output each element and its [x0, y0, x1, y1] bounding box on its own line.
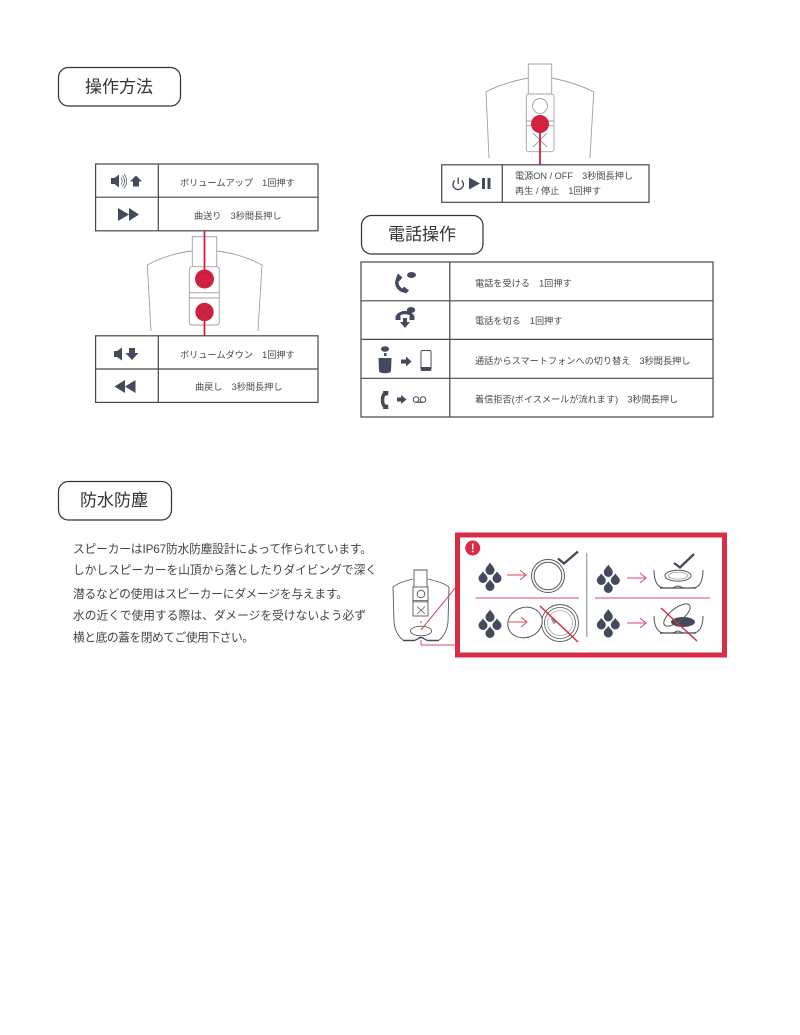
icon: power, play, pause: [453, 178, 490, 190]
illustration: speaker front with power button: [486, 64, 594, 165]
heading: 防水防塵: 防水防塵: [80, 491, 148, 510]
illustration: speaker with cap callout: [393, 570, 456, 645]
panel: waterproof warning box: [458, 535, 724, 655]
illustration: speaker front with volume buttons: [147, 231, 262, 336]
text: power and playback: [515, 170, 633, 196]
text block: waterproof description: 横と底の蓋を閉めてご使用下さい。: [73, 630, 254, 644]
heading: 電話操作: [362, 216, 483, 254]
icon: volume down: [114, 348, 138, 360]
text block: waterproof description: スピーカーはIP67防水防塵設計によって作られています。: [73, 542, 372, 556]
text: volume up: ボリュームアップ 1回押す: [180, 177, 295, 188]
panel: phone operation table: [361, 262, 713, 417]
text block: waterproof description: 水の近くで使用する際は、ダメージを受けないよう必ず: [73, 608, 366, 622]
text block: waterproof description: [73, 542, 377, 644]
panel: power and playback table: [442, 165, 649, 202]
text: answer call: 電話を受ける 1回押す: [475, 278, 572, 288]
heading: 操作方法: 操作方法: [85, 78, 153, 96]
icon: fast forward: [118, 208, 139, 221]
text: power and playback: 再生 / 停止 1回押す: [515, 185, 601, 196]
icon: rewind: [114, 380, 136, 393]
panel: volume down and previous track table: [96, 336, 318, 402]
icon: switch to smartphone: [378, 346, 431, 373]
text: power and playback: 電源ON / OFF 3秒間長押し: [515, 170, 633, 181]
example: side cap open: [597, 600, 703, 641]
panel: volume up and next track table: [96, 164, 318, 231]
example: bottom cap open: [478, 602, 578, 643]
text: end call: 電話を切る 1回押す: [475, 315, 562, 326]
icon: answer call: [396, 272, 416, 294]
text: next track: 曲送り 3秒間長押し: [194, 210, 282, 221]
example: side cap closed correctly: [597, 554, 703, 593]
icon: reject to voicemail: [382, 391, 426, 409]
heading: 電話操作: 電話操作: [388, 225, 456, 244]
icon: volume up: [111, 174, 142, 188]
heading: 操作方法: [58, 68, 180, 106]
text: switch to smartphone: 通話からスマートフォンへの切り替え 3秒間長押し: [475, 355, 690, 366]
text: reject to voicemail: 着信拒否(ボイスメールが流れます) 3秒間長押し: [475, 394, 678, 404]
text: volume down: ボリュームダウン 1回押す: [180, 349, 295, 360]
icon: alert: [465, 540, 480, 556]
text: previous track: 曲戻し 3秒間長押し: [195, 381, 282, 392]
example: bottom cap closed correctly: [478, 552, 578, 592]
heading: 防水防塵: [58, 482, 172, 520]
text block: waterproof description: 潜るなどの使用はスピーカーにダメージを与えます。: [73, 587, 348, 601]
text block: waterproof description: しかしスピーカーを山頂から落としたりダイビングで深く: [73, 563, 377, 577]
icon: end call: [396, 307, 415, 328]
